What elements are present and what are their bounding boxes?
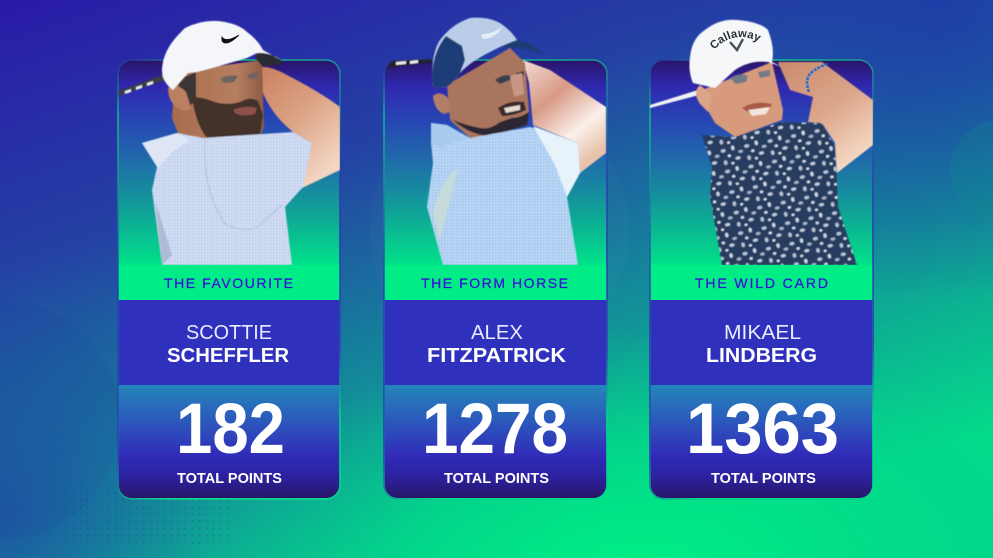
- label band: [119, 265, 339, 300]
- name band: MIKAEL: [724, 322, 801, 344]
- icon: cap swoosh: [222, 35, 239, 43]
- name band: SCHEFFLER: [167, 345, 290, 367]
- cap logo text: Callaway: [710, 30, 761, 48]
- points panel: 1363: [686, 390, 839, 469]
- card: the wild card: [649, 19, 874, 500]
- name band: [651, 300, 872, 385]
- points panel: 1278: [422, 390, 568, 469]
- points panel: [651, 385, 872, 498]
- points panel: TOTAL POINTS: [177, 470, 282, 487]
- card: the favourite: [118, 21, 340, 499]
- points panel: [385, 385, 606, 498]
- points panel: TOTAL POINTS: [444, 470, 549, 487]
- card panel: [650, 60, 873, 499]
- points panel: [119, 385, 339, 498]
- label band: [385, 265, 606, 300]
- name band: ALEX: [471, 322, 523, 344]
- name band: FITZPATRICK: [427, 345, 567, 367]
- icon: bracelet: [807, 64, 828, 92]
- points panel: TOTAL POINTS: [711, 470, 816, 487]
- name band: [119, 300, 339, 385]
- card panel: [384, 60, 607, 499]
- card: the form horse: [384, 18, 607, 499]
- label band: [651, 265, 872, 300]
- label band: THE FORM HORSE: [421, 275, 568, 291]
- golfer: Mikael Lindberg: [649, 19, 873, 265]
- icon: cap swoosh: [482, 27, 502, 39]
- card panel: [118, 60, 340, 499]
- name band: SCOTTIE: [186, 322, 272, 344]
- label band: THE WILD CARD: [695, 275, 828, 291]
- icon: cap chevron: [730, 39, 743, 50]
- name band: LINDBERG: [706, 345, 817, 367]
- golfer: Scottie Scheffler: [118, 21, 340, 265]
- points panel: 182: [176, 390, 285, 469]
- label band: THE FAVOURITE: [164, 275, 293, 291]
- golfer: Alex Fitzpatrick: [387, 18, 606, 265]
- name band: [385, 300, 606, 385]
